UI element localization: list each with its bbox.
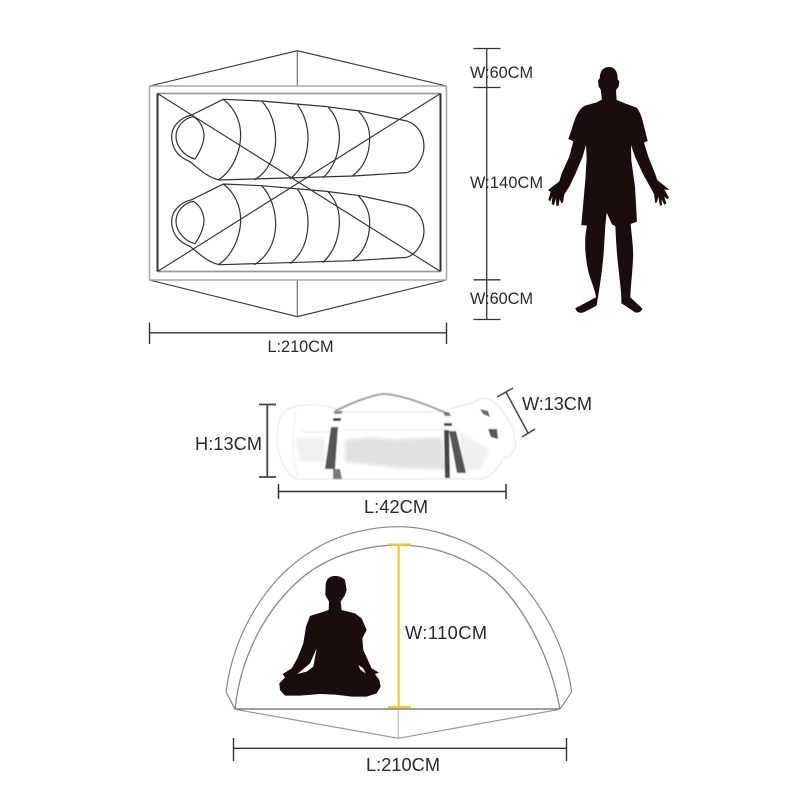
side length dimension: L:210CM xyxy=(366,755,440,775)
bag height dimension: H:13CM xyxy=(195,434,262,454)
tent floor plan xyxy=(150,51,446,317)
width dimension scale xyxy=(470,48,543,320)
sleeping bag bottom xyxy=(172,184,424,265)
floor length dimension: L:210CM xyxy=(268,338,334,356)
left strap xyxy=(325,411,343,479)
side length dimension xyxy=(234,738,566,775)
bag length dimension xyxy=(278,484,506,517)
bag width dimension: W:13CM xyxy=(522,394,592,414)
label: W 60CM bottom: W:60CM xyxy=(470,290,533,308)
label: W 110CM: W:110CM xyxy=(405,623,487,643)
right straps xyxy=(443,409,498,478)
tent side view dome xyxy=(226,527,572,738)
bag carry handle xyxy=(335,394,446,413)
floor length dimension xyxy=(150,322,446,356)
sleeping bag top xyxy=(172,99,424,180)
label: W 60CM top: W:60CM xyxy=(470,64,533,82)
bag width dimension xyxy=(497,388,592,437)
bag height dimension xyxy=(195,404,276,477)
label: W 140CM: W:140CM xyxy=(470,174,543,192)
icon: standing man silhouette xyxy=(548,67,670,313)
tent outer fly outline xyxy=(150,51,446,317)
tent inner rectangle with diagonals xyxy=(158,94,440,272)
rolled tent bag illustration xyxy=(277,394,516,479)
bag length dimension: L:42CM xyxy=(364,497,428,517)
bag contents shading xyxy=(295,432,490,470)
yellow height marker xyxy=(388,544,411,707)
icon: sitting person silhouette xyxy=(279,576,381,697)
